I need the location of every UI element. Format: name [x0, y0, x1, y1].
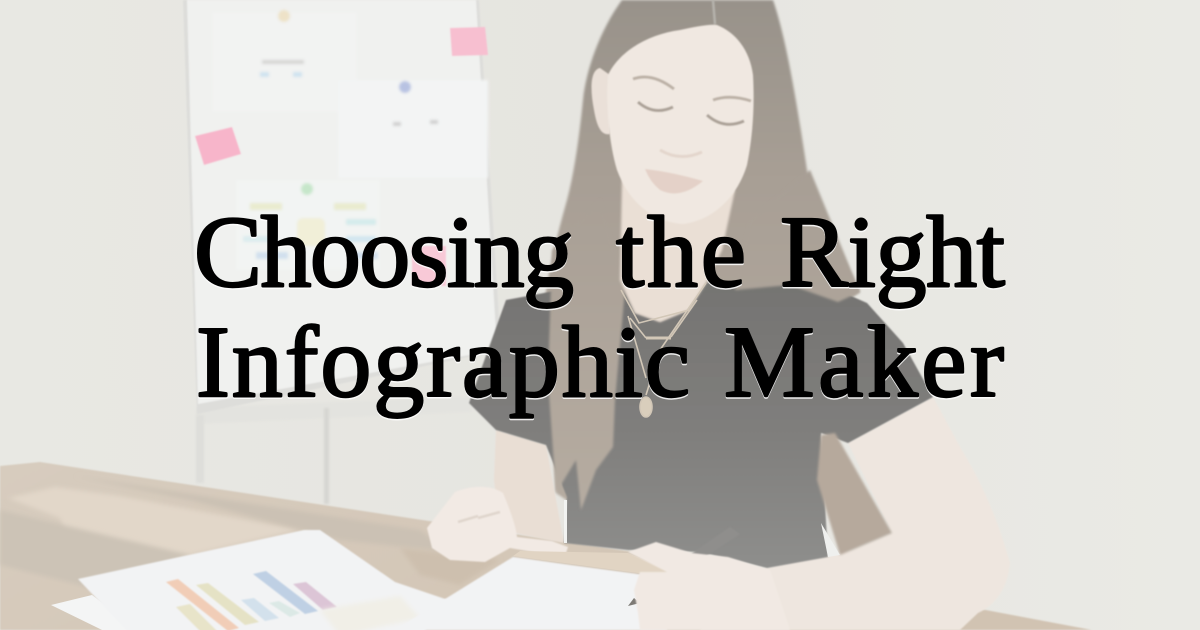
title highlight: Right [780, 198, 1005, 311]
woman: left arm [494, 430, 564, 543]
title line 1: the [616, 196, 746, 309]
woman: face [607, 0, 754, 224]
title highlight: Choosing [194, 198, 574, 311]
shirt sliver [564, 500, 567, 543]
woman: neck [620, 180, 735, 322]
paper: right sheet [395, 557, 667, 630]
woman: back hair [545, 0, 860, 510]
left hand [427, 487, 568, 562]
woman: right arm [700, 397, 1010, 630]
sticky note: left [195, 127, 241, 165]
title highlight: Infographic [196, 308, 690, 421]
clipboard edge [513, 551, 672, 576]
hair part [713, 0, 715, 24]
pen [628, 527, 740, 606]
lips [645, 169, 703, 193]
title highlight [194, 198, 1005, 421]
title [194, 196, 1005, 421]
title highlight: Maker [724, 308, 1004, 421]
paper stack with bar chart [51, 530, 672, 630]
necklace [621, 283, 706, 417]
hair lock behind right arm [817, 433, 892, 555]
title line 1 [194, 196, 1005, 309]
title highlight: the [616, 198, 746, 311]
white sliver right [821, 523, 840, 557]
board sheets [212, 10, 488, 270]
paper: main sheet [78, 530, 457, 630]
paper: back sheet [51, 595, 150, 630]
eyebrows [633, 77, 674, 89]
hair strands over shirt [548, 170, 892, 555]
whiteboard [183, 0, 501, 414]
table [0, 462, 1092, 630]
eyes [638, 102, 673, 111]
title line 2: Maker [724, 306, 1004, 419]
nose [660, 150, 702, 157]
title line 2: Infographic [196, 306, 690, 419]
sticky note: centre [412, 246, 446, 286]
woman: ear [592, 68, 610, 134]
whiteboard stand [196, 396, 472, 504]
woman: black t-shirt [469, 283, 933, 568]
bar chart [166, 571, 337, 630]
sticky note: top right [450, 27, 488, 56]
title line 1: Right [780, 196, 1005, 309]
title line 1: Choosing [194, 196, 574, 309]
title line 2 [196, 306, 1004, 419]
right hand [628, 542, 790, 630]
